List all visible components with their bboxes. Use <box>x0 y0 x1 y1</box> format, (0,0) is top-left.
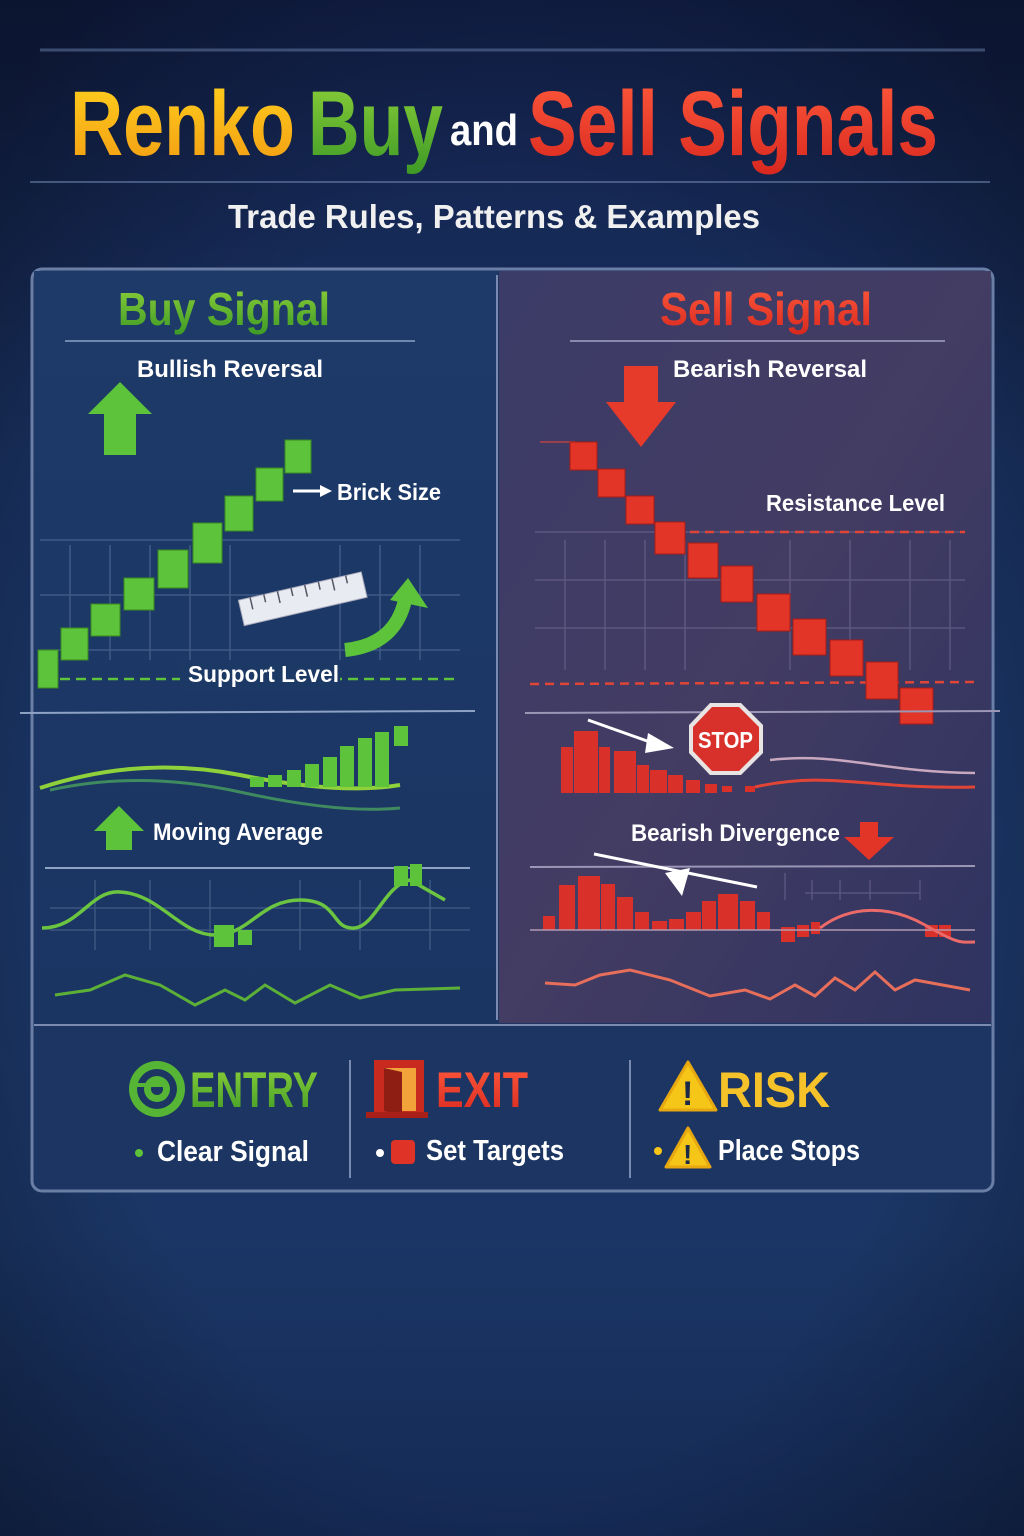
label: brick size <box>293 479 441 505</box>
chart: declining histogram <box>561 720 975 793</box>
chart: oscillator <box>42 864 470 1005</box>
heading: buy signal: Buy Signal <box>118 283 330 335</box>
panel: buy signal <box>20 271 497 1023</box>
label: bearish reversal: Bearish Reversal <box>673 356 867 383</box>
green renko bricks <box>38 440 311 688</box>
icon: stop sign <box>689 703 763 775</box>
icon: warning: ! <box>682 1075 693 1113</box>
panel: entry <box>129 1061 318 1168</box>
icon: exit door <box>366 1060 428 1118</box>
heading: sell signal: Sell Signal <box>660 283 872 335</box>
chart: divergence <box>530 854 975 999</box>
title: and <box>450 106 518 155</box>
panel: entry: ENTRY <box>190 1062 318 1118</box>
icon: ruler <box>238 572 367 626</box>
label: bullish reversal: Bullish Reversal <box>137 356 323 383</box>
icon: red down arrow <box>606 366 676 447</box>
panel: exit: Set Targets <box>426 1135 564 1167</box>
title: Buy <box>308 73 443 175</box>
icon: curved green arrow <box>345 578 428 650</box>
label: bearish divergence: Bearish Divergence <box>631 820 840 847</box>
icon: green up arrow <box>88 382 152 455</box>
panel: risk <box>654 1062 860 1170</box>
icon: warning <box>660 1062 716 1113</box>
icon: stop sign: STOP <box>698 727 753 753</box>
label: moving average: Moving Average <box>153 819 323 846</box>
support level: Support Level <box>188 661 339 687</box>
panel: sell signal <box>497 271 1000 1023</box>
label: bearish divergence <box>631 820 894 860</box>
support level <box>60 661 460 690</box>
panel: risk: Place Stops <box>718 1135 860 1167</box>
label: moving average <box>94 806 323 850</box>
icon: target <box>129 1061 185 1117</box>
title <box>70 73 938 175</box>
main panel <box>20 269 1000 1191</box>
chart: moving average bars <box>40 726 408 809</box>
panel: exit: EXIT <box>436 1062 528 1118</box>
panel: entry: Clear Signal <box>157 1136 309 1168</box>
red renko bricks <box>570 442 933 724</box>
panel: risk: ! <box>683 1139 692 1170</box>
title: Renko <box>70 73 295 175</box>
subtitle: Trade Rules, Patterns & Examples <box>228 198 760 235</box>
panel: risk: RISK <box>718 1062 830 1118</box>
label: resistance level: Resistance Level <box>766 490 945 516</box>
label: brick size: Brick Size <box>337 479 441 505</box>
chart grid <box>535 532 965 670</box>
chart grid <box>40 540 460 660</box>
panel: exit <box>366 1060 564 1167</box>
